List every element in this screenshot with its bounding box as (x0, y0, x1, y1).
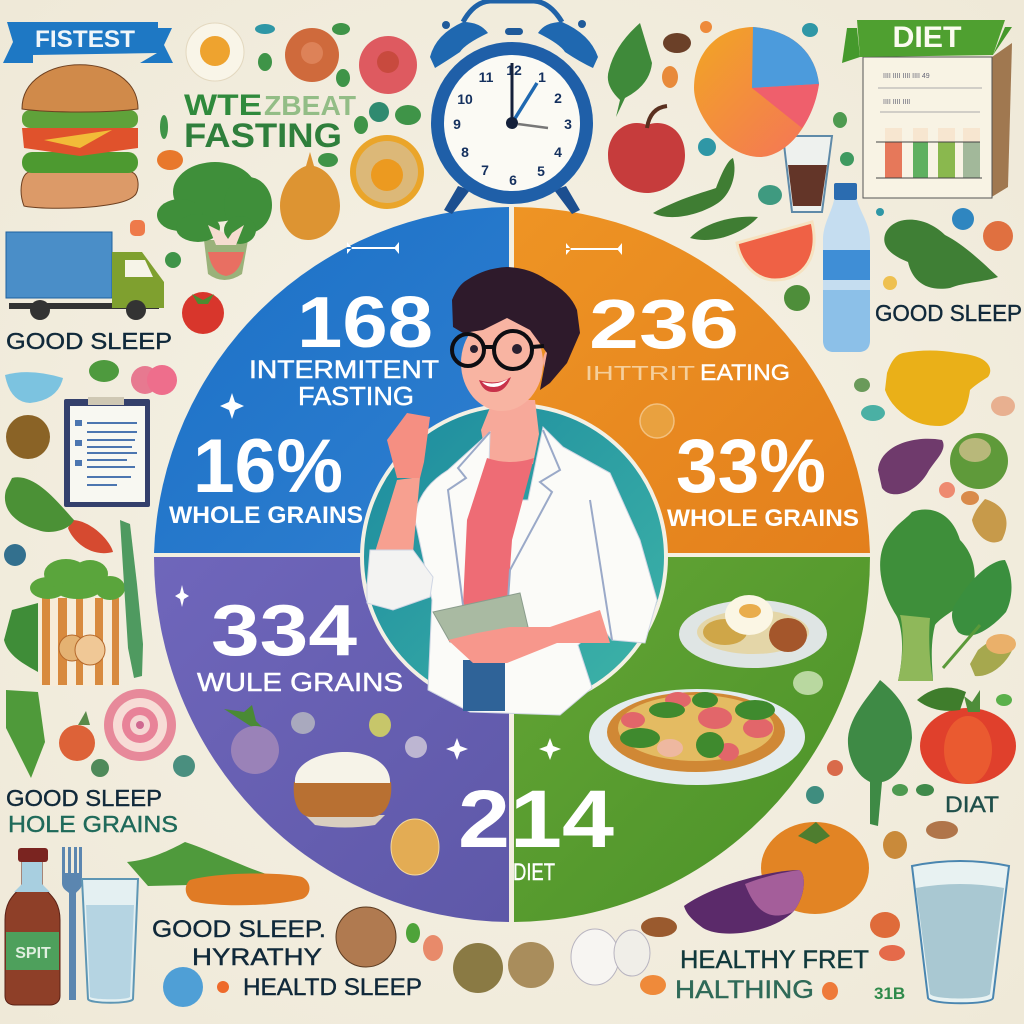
icon: yellow peppers (885, 350, 990, 426)
icon: soda bottle: SPIT (15, 945, 51, 962)
icons: bottom foods (163, 907, 905, 1007)
glasses (452, 331, 544, 369)
icon: tomato slice (285, 28, 339, 82)
left sleeve (367, 550, 433, 610)
panel: blue quadrant (154, 207, 509, 553)
text: healthy fret halthing: HEALTHY FRET (680, 946, 869, 974)
icon: small broccoli (89, 360, 119, 382)
chart: pie (694, 27, 819, 157)
icon: purple yam (878, 439, 944, 494)
banner: fistest (3, 22, 173, 63)
neck (481, 400, 539, 464)
panel: orange quadrant (514, 207, 870, 553)
alarm clock: 2 (554, 90, 562, 106)
blue panel text: 16% (193, 424, 343, 509)
icon: cookie (6, 415, 50, 459)
orange panel text: 236 (589, 285, 739, 363)
alarm clock: 8 (461, 144, 469, 160)
icon: salad basket (30, 559, 125, 686)
icons: top foods (130, 23, 424, 280)
hands (512, 63, 548, 128)
banner: diet (842, 20, 1012, 63)
shirt (463, 458, 534, 605)
label: good sleep hole grains (6, 785, 178, 837)
text: good sleep hyrathy health sleep: GOOD SLEEP. (152, 916, 326, 943)
alarm clock: 3 (564, 116, 572, 132)
alarm clock: 11 (479, 69, 494, 85)
coat lapels (448, 430, 612, 640)
icon: bread roll (391, 819, 439, 875)
heading: intermittent fasting (184, 89, 356, 155)
ear (543, 348, 561, 374)
banner: fistest: FISTEST (35, 26, 135, 53)
purple panel text (197, 591, 403, 697)
forearm and hand (448, 610, 610, 663)
icon: tall leaf (608, 23, 652, 117)
icon: burger (21, 65, 138, 208)
icon: green leaves (653, 158, 758, 240)
label: diat: DIAT (945, 792, 999, 817)
icon: tomato large (917, 688, 1016, 784)
panel: central quadrant circle (154, 207, 870, 922)
small scattered right (806, 694, 1012, 938)
icon: nut (972, 499, 1007, 542)
icon: nuts top (662, 21, 854, 205)
label: good sleep hole grains: HOLE GRAINS (8, 811, 178, 837)
alarm clock: 9 (453, 116, 461, 132)
orange panel droplet (640, 404, 674, 438)
text: healthy fret halthing (675, 946, 869, 1004)
chart: bar calendar (863, 43, 1012, 198)
icon: citrus (350, 135, 424, 209)
purple panel text: 334 (211, 591, 357, 671)
icon: spinach right (884, 220, 998, 289)
icon: glass of cola (783, 136, 832, 212)
alarm clock: 12 (506, 62, 522, 78)
orange panel text: 33% (676, 424, 826, 509)
alarm clock: 1 (538, 69, 546, 85)
alarm clock: 6 (509, 172, 517, 188)
orange panel text: WHOLE GRAINS (667, 505, 859, 532)
bells (430, 22, 488, 68)
handle (463, 1, 562, 22)
smile (479, 377, 511, 392)
inner teal circle (362, 405, 666, 709)
icon: berries right (784, 208, 1013, 311)
legs (444, 186, 580, 214)
coat body (415, 427, 657, 715)
blue panel text: INTERMITENT (249, 356, 439, 384)
face (461, 315, 543, 411)
icon: grapefruit (359, 36, 417, 94)
icon: orange bit (130, 220, 145, 236)
green panel text: DIET (513, 859, 555, 886)
small purple panel items (291, 712, 427, 758)
bell knobs (442, 20, 586, 35)
text: healthy fret halthing: HALTHING (675, 976, 814, 1004)
icon: beet (224, 705, 279, 774)
eyes (470, 344, 522, 354)
orange panel text: IHTTRIT (585, 363, 695, 385)
label: good sleep left: GOOD SLEEP (6, 328, 172, 354)
raised forearm (375, 477, 420, 552)
icon: small pink bits (854, 378, 1015, 505)
icon: water glass left (82, 879, 138, 1003)
icon: small plate (679, 595, 827, 668)
icon: small fruit (970, 636, 1015, 676)
heading: intermittent fasting: WTE (184, 89, 262, 122)
icon: tomato (182, 292, 224, 334)
icon: grapefruit slice (737, 222, 814, 280)
clock face (431, 42, 593, 204)
icon: soda bottle (5, 848, 60, 1005)
label: good sleep right: GOOD SLEEP (875, 300, 1022, 326)
raised hand (387, 413, 430, 478)
icon: delivery truck (6, 232, 164, 320)
icon: clipboard (64, 397, 150, 507)
icon: potato (280, 152, 340, 240)
heading: intermittent fasting: FASTING (184, 117, 342, 155)
label: 31: 31B (874, 984, 905, 1003)
label: good sleep hole grains: GOOD SLEEP (6, 785, 162, 811)
blue panel text (169, 283, 439, 529)
icon: leafy bunch (157, 162, 272, 280)
icon: water card (5, 372, 63, 403)
text: good sleep hyrathy health sleep (152, 916, 422, 1001)
icon: bok choy (880, 509, 975, 681)
person: doctor in white coat (367, 267, 657, 715)
hair (452, 267, 580, 390)
icon: rice cake (294, 752, 391, 828)
panel: green quadrant (514, 557, 870, 922)
orange panel text: EATING (700, 360, 790, 385)
text: good sleep hyrathy health sleep: HYRATHY (192, 944, 322, 971)
icon: spinach small (943, 560, 1012, 668)
icon: carrot (127, 842, 310, 905)
blue panel text: FASTING (298, 381, 414, 411)
alarm clock: 10 (457, 91, 473, 107)
small leaves (160, 23, 421, 268)
banner: diet: DIET (892, 21, 962, 54)
purple panel text: WULE GRAINS (197, 667, 403, 697)
jeans (463, 660, 505, 711)
icon: greens with radish (5, 477, 113, 553)
icon: eggplant (684, 870, 804, 934)
icon: fork (62, 847, 82, 1000)
orange panel text (585, 285, 859, 532)
purple panel foods (224, 705, 439, 875)
panel: purple quadrant (154, 557, 509, 922)
icon: spinach leaf (848, 680, 912, 826)
tablet (433, 593, 528, 643)
blue panel text: 168 (297, 283, 433, 363)
icon: pizza plate (589, 689, 805, 785)
icons: left side greens (4, 520, 195, 778)
alarm clock (430, 1, 598, 214)
chart: bar calendar: IIII IIII IIII IIII 49 (883, 73, 930, 80)
icon: apple (608, 106, 685, 193)
alarm clock: 7 (481, 162, 489, 178)
heading: intermittent fasting: ZBEAT (264, 90, 356, 121)
green panel text: 214 (458, 774, 614, 865)
icon: water glass right (912, 861, 1009, 1003)
icon: water bottle (823, 183, 870, 352)
icon: radish (131, 365, 177, 395)
icon: blue ball (4, 544, 26, 566)
alarm clock: 5 (537, 163, 545, 179)
icon: egg (186, 23, 244, 81)
icon: large orange (761, 822, 869, 914)
sparkles (175, 242, 622, 760)
blue panel text: WHOLE GRAINS (169, 502, 363, 529)
icon: pale leaf (793, 671, 823, 695)
icon: halved fig (950, 433, 1008, 489)
green panel foods (589, 595, 827, 785)
icon: orange chunk (157, 150, 183, 170)
text: good sleep hyrathy health sleep: HEALTD SLEEP (243, 974, 422, 1001)
alarm clock: 4 (554, 144, 562, 160)
chart: bar calendar: IIII IIII IIII (883, 99, 910, 106)
